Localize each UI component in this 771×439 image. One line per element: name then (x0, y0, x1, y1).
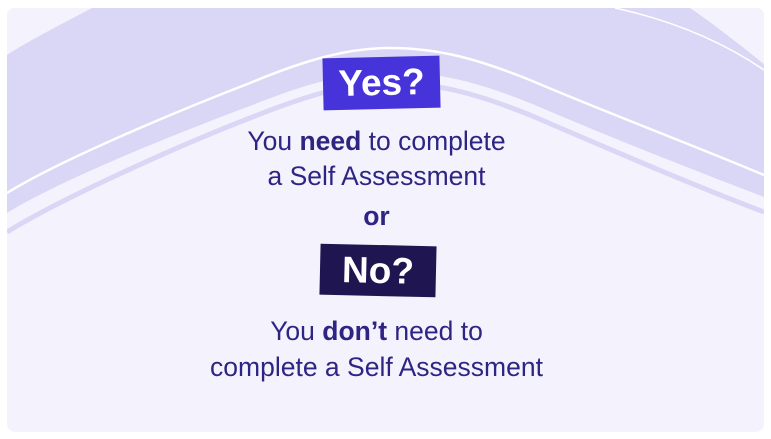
text: you need to complete (247, 126, 506, 191)
label box: Yes? (322, 56, 441, 110)
text: you need to complete: a Self Assessment (268, 161, 486, 191)
text: you don't need to (210, 316, 543, 382)
label box: No?: No? (342, 249, 414, 292)
label box: No? (319, 244, 437, 297)
label box: Yes?: Yes? (338, 61, 425, 104)
text: you don't need to: You don’t need to (270, 316, 483, 346)
text: or: or (363, 201, 390, 231)
text: you need to complete: You need to complete (247, 126, 506, 156)
text: you don't need to: complete a Self Assessment (210, 352, 543, 382)
